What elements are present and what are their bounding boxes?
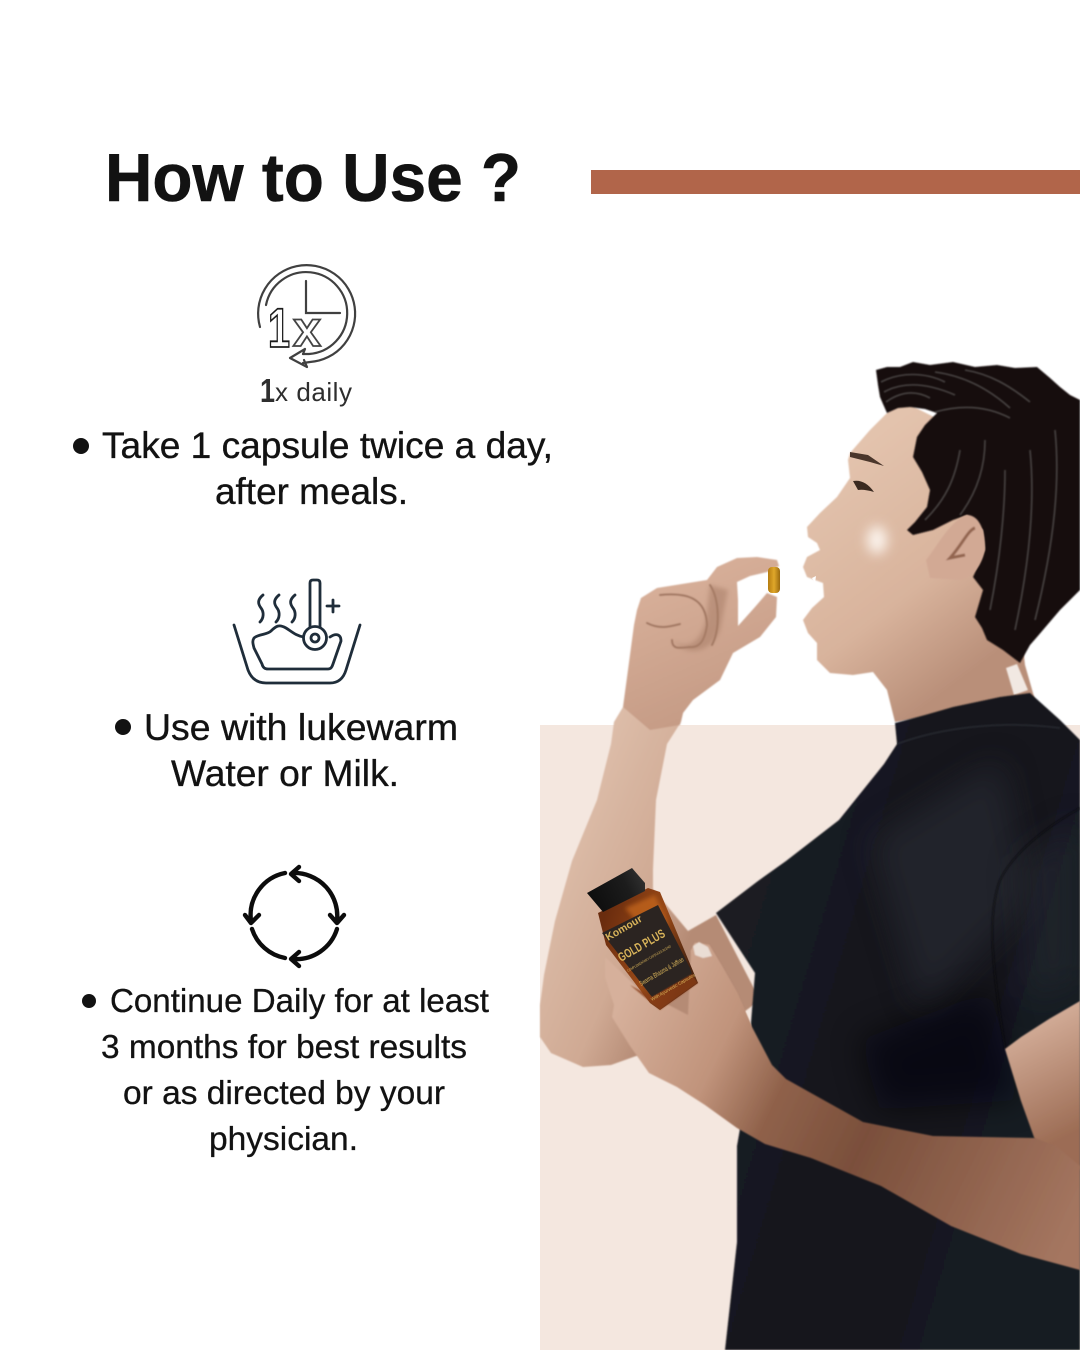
step text: or as directed by your: [123, 1075, 445, 1112]
upper arm on far side: [1005, 1001, 1080, 1170]
step 1: once daily: [73, 265, 553, 512]
bullet: [82, 994, 96, 1008]
bottle label: [602, 905, 692, 997]
icon: clock with 1x: 1: [268, 296, 290, 359]
icon caption: 1: [260, 372, 275, 409]
icon: clock with 1x: [258, 265, 355, 367]
step text: physician.: [209, 1121, 358, 1158]
step 2: lukewarm: [115, 580, 458, 794]
bottle text: With Ayurvedic Capsules: [650, 972, 696, 1002]
left arm and raised hand: [540, 557, 779, 1067]
step text: Water or Milk.: [171, 753, 399, 794]
bottle glow: [625, 895, 668, 925]
icon caption: x daily: [275, 377, 352, 407]
capsule: [768, 567, 780, 593]
accent bar: [591, 170, 1080, 194]
facial features: [812, 452, 884, 583]
shirt: [716, 693, 1080, 1350]
bottle text: [604, 913, 696, 1002]
step 3: continue daily: [82, 867, 490, 1158]
shirt folds: [860, 725, 1080, 1110]
bottle text: Komour: [604, 913, 644, 944]
hair highlights: [881, 370, 1057, 630]
bottle cap: [587, 868, 645, 912]
bottle body: [598, 888, 698, 1010]
step text: [102, 425, 553, 512]
step text: Use with lukewarm: [144, 707, 458, 748]
step text: 3 months for best results: [101, 1029, 467, 1066]
bottle text: COMPLEMENTARY CAPSULES BLEND: [626, 944, 672, 973]
bullet: [115, 719, 131, 735]
icon: cycle arrows: [245, 867, 344, 966]
step text: [144, 707, 458, 794]
icon caption: [260, 372, 352, 409]
step text: Continue Daily for at least: [110, 983, 490, 1020]
bottle text: GOLD PLUS: [616, 926, 668, 965]
step text: Take 1 capsule twice a day,: [102, 425, 553, 466]
forearm and hand holding bottle: [605, 943, 1080, 1270]
step text: after meals.: [215, 471, 408, 512]
icon: clock with 1x: x: [293, 301, 321, 357]
bullet: [73, 438, 89, 454]
hair: [876, 362, 1080, 663]
icon: basin with steam and thermometer: [234, 580, 360, 683]
neck and face: [803, 400, 1035, 722]
cheek highlight: [867, 526, 887, 554]
title: How to Use ?: [105, 140, 521, 216]
bottle text: Swarna Bhasma & Jaffran: [638, 957, 685, 988]
neck shadow and highlight: [1006, 664, 1028, 695]
person taking capsule: [540, 362, 1080, 1350]
thumb over bottle: [691, 942, 751, 1060]
product bottle: [587, 868, 698, 1010]
step text: [101, 983, 490, 1158]
ear: [926, 515, 985, 580]
panel: peach background block: [540, 725, 1080, 1350]
